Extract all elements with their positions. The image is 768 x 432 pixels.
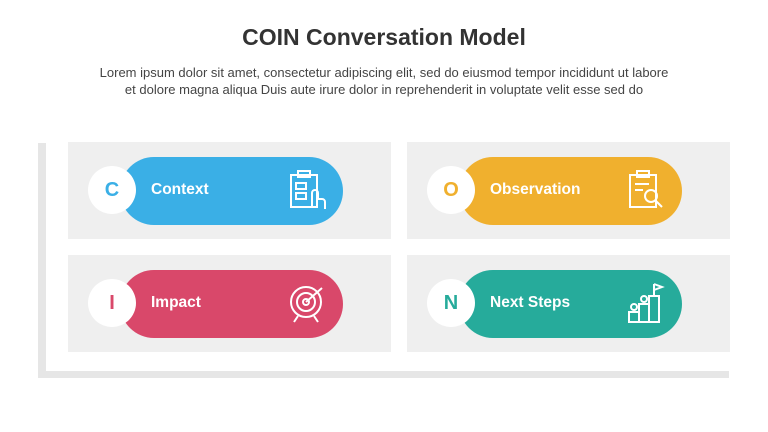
icon: target [290,286,323,322]
panel: observation [407,142,730,239]
subtitle: Lorem ipsum dolor sit amet, consectetur adipiscing elit, sed do eiusmod tempor incididunt ut labore [100,65,668,80]
panel: next steps: N [444,292,458,314]
panel: context [68,142,391,239]
panel: context: C [105,179,119,201]
subtitle [100,65,668,97]
title: COIN Conversation Model [242,24,526,50]
panel: observation: O [443,179,459,201]
icon: clipboard search [629,170,663,208]
panel: observation: Observation [490,181,580,198]
icon: steps [628,283,665,323]
panel: impact [68,255,391,352]
axis frame [38,143,46,378]
panel: impact: I [109,292,115,314]
subtitle: et dolore magna aliqua Duis aute irure dolor in reprehenderit in voluptate velit esse sed do [125,82,643,97]
icon: clipboard [290,170,326,209]
panel: impact: Impact [151,294,201,311]
panel: next steps [407,255,730,352]
panel: next steps: Next Steps [490,294,570,311]
panel: context: Context [151,181,209,198]
